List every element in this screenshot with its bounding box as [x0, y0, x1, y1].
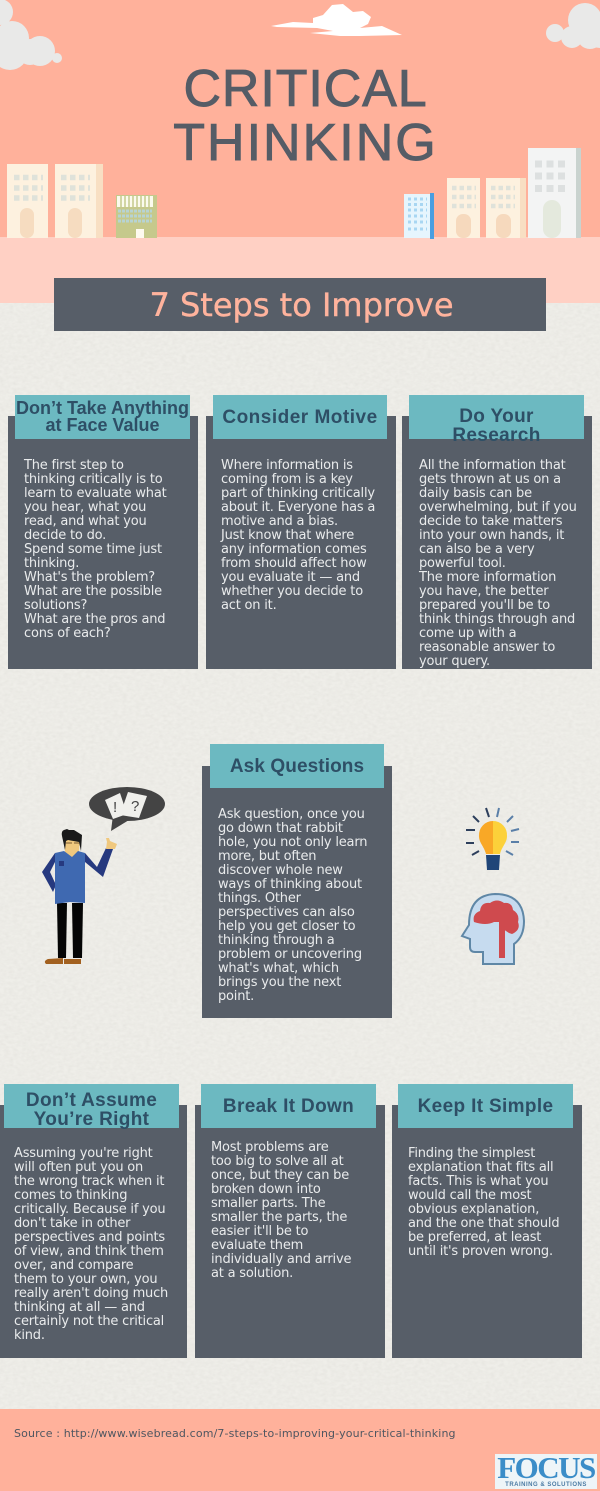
heading: do your research [409, 395, 584, 439]
heading: keep it simple [398, 1084, 573, 1128]
heading: ask questions [210, 744, 384, 788]
heading: break it down [201, 1084, 376, 1128]
title: THINKING [173, 114, 438, 172]
header scene [0, 0, 600, 303]
heading: do your research: Research [452, 425, 541, 446]
illustration: man with speech bubble [42, 787, 165, 964]
title: CRITICAL [183, 60, 428, 118]
pale ground band [0, 237, 600, 303]
building: cream pair left [7, 164, 103, 238]
text: step 2: Where information is coming from is a key part of thinking critically about it. Everyone has a motive and a bias. Just know that where any information comes from should affect how you evaluate it — and whether you decide to act on it. [221, 458, 375, 613]
icon: light bulb [466, 808, 520, 870]
speech bubble [89, 787, 165, 831]
panel: do your research [402, 416, 592, 669]
panel: don't assume you're right [0, 1105, 187, 1358]
panel: ask questions [202, 766, 392, 1018]
text: step 3: All the information that gets thrown at us on a daily basis can be overwhelming, but if you decide to take matters into your own hands, it can also be a very powerful tool. The more information you have, the better prepared you'll be to think things through and come up with a reasonable answer to your query. [419, 458, 577, 669]
heading: do your research: Do Your [459, 406, 534, 427]
heading: don't assume: Don’t Assume [26, 1090, 157, 1111]
source text: Source : http://www.wisebread.com/7-steps-to-improving-your-critical-thinking [14, 1427, 456, 1440]
panel: break it down [195, 1105, 385, 1358]
building: white tall [528, 148, 581, 238]
heading: don't assume [4, 1084, 179, 1128]
heading: don't take anything [15, 395, 190, 439]
logo: focus training & solutions: TRAINING & SOLUTIONS [505, 1482, 587, 1488]
text: step 5: Assuming you're right will often put you on the wrong track when it comes to thinking critically. Because if you don't take in other perspectives and points of view, and think them over, and compare them to your own, you really aren't doing much thinking at all — and certainly not the critical kind. [14, 1146, 168, 1343]
panel: consider motive [206, 416, 396, 669]
building: blue [404, 193, 434, 239]
icon: head with brain [460, 893, 525, 965]
heading: consider motive [213, 395, 387, 439]
building: cream pair right [447, 178, 526, 238]
text: step 4: Ask question, once you go down that rabbit hole, you not only learn more, but often discover whole new ways of thinking about things. Other perspectives can also help you get closer to thinking through a problem or uncovering what's what, which brings you the next point. [218, 807, 367, 1004]
speech bubble: ! [113, 799, 117, 816]
building: green [116, 195, 157, 238]
panel: don't take anything at face value [8, 416, 198, 669]
heading: keep it simple: Keep It Simple [418, 1096, 553, 1116]
text: step 7: Finding the simplest explanation that fits all facts. This is what you would call the most obvious explanation, and the one that should be preferred, at least until it's proven wrong. [408, 1146, 559, 1259]
footer band [0, 1409, 600, 1491]
heading: don't take anything: at Face Value [45, 415, 160, 435]
text: step 6: Most problems are too big to solve all at once, but they can be broken down into smaller parts. The smaller the parts, the easier it'll be to evaluate them individually and arrive at a solution. [211, 1140, 351, 1281]
heading: break it down: Break It Down [223, 1096, 354, 1116]
panel: keep it simple [392, 1105, 582, 1358]
banner: 7 steps to improve [54, 278, 546, 331]
heading: don't take anything: Don’t Take Anything [16, 398, 189, 418]
title [173, 60, 438, 172]
cloud: left [0, 0, 62, 70]
man [42, 829, 117, 964]
heading: ask questions: Ask Questions [230, 756, 364, 776]
banner: 7 steps to improve: 7 Steps to Improve [149, 286, 454, 324]
text: step 1: The first step to thinking critically is to learn to evaluate what you hear, what you read, and what you decide to do. Spend some time just thinking. What's the problem? What are the possible solutions? What are the pros and cons of each? [24, 458, 166, 641]
heading: don't assume: You’re Right [34, 1109, 149, 1130]
skyline illustration [0, 0, 600, 239]
heading: consider motive: Consider Motive [222, 406, 378, 428]
cloud: right [546, 3, 600, 49]
cloud: white [271, 4, 402, 36]
speech bubble: ? [131, 798, 139, 815]
